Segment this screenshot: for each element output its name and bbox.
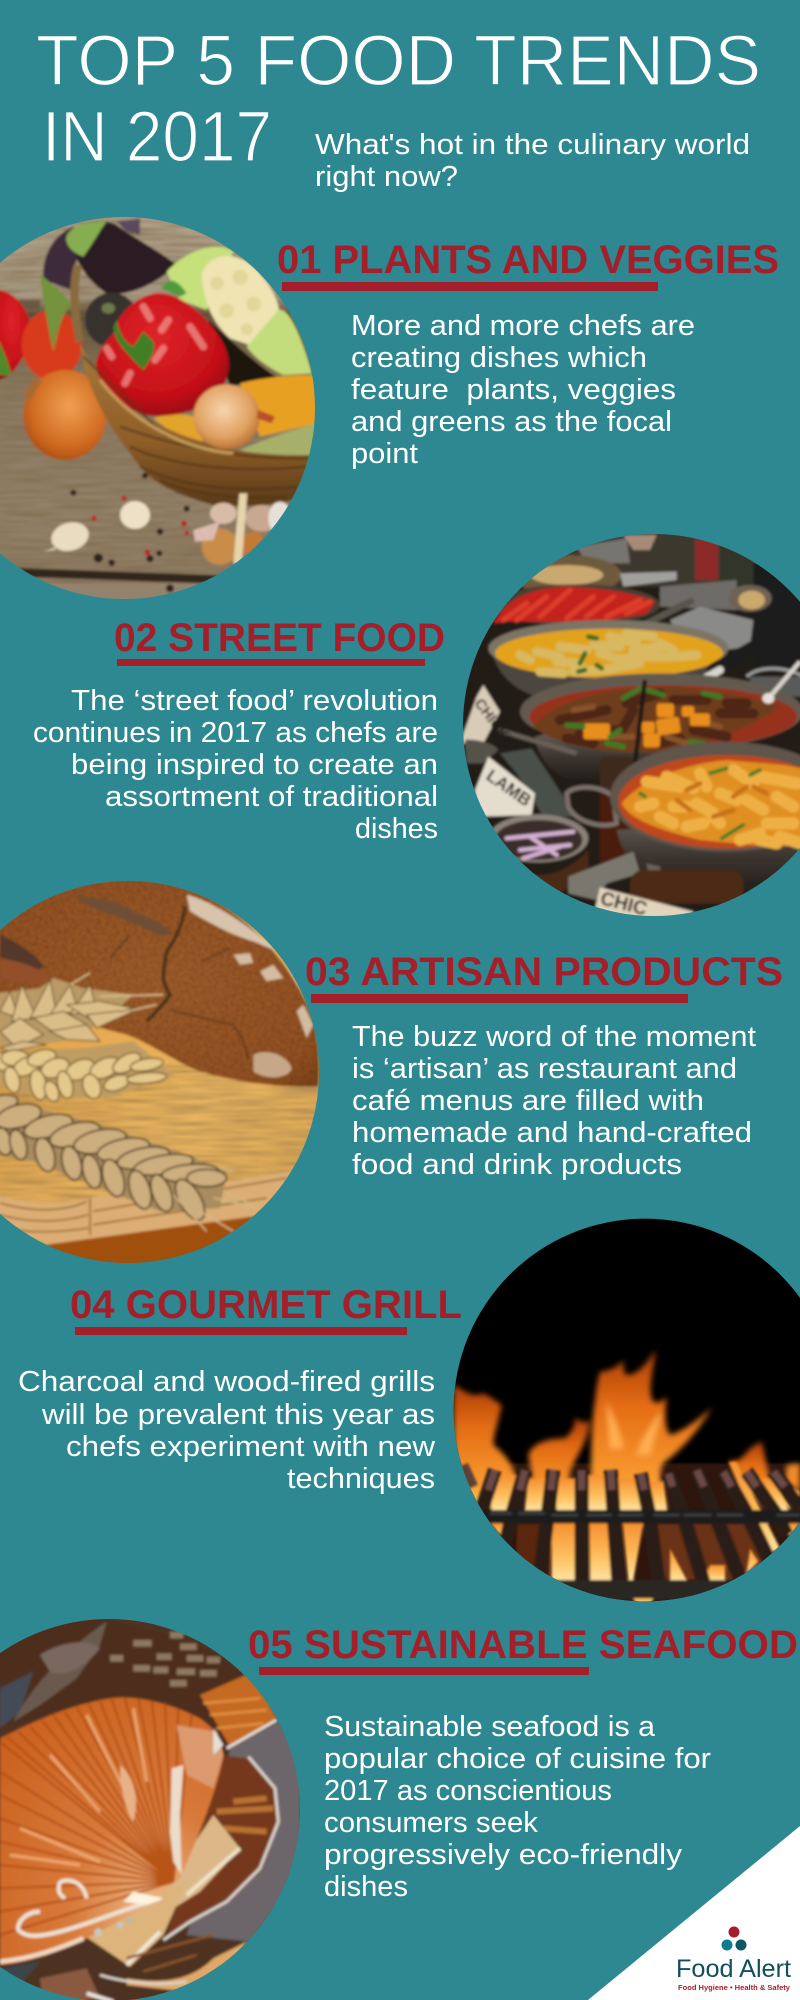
body text: feature plants, veggies [351,374,676,406]
body text [352,1021,756,1181]
body text [18,1366,436,1495]
logo dots [722,1926,746,1950]
heading: 03 artisan products: 03 ARTISAN PRODUCTS [305,950,783,994]
photo: flames over grill [450,1215,800,1608]
heading underline [117,659,425,666]
body text: Charcoal and wood-fired grills [18,1366,435,1398]
heading: 02 street food: 02 STREET FOOD [114,616,445,660]
photo: street food pans: CHIC [598,888,649,920]
subtitle: right now? [315,161,458,193]
heading: 04 gourmet grill: 04 GOURMET GRILL [70,1283,462,1327]
body text: continues in 2017 as chefs are [33,717,438,749]
photo: street food pans: LAMB [483,765,535,810]
body text: Sustainable seafood is a [324,1711,656,1743]
body text: More and more chefs are [351,310,695,342]
title: TOP 5 FOOD TRENDS [36,22,761,101]
panel: 05 sustainable seafood [0,1615,798,2000]
logo: Food Alert [676,1926,791,1992]
body text: is ‘artisan’ as restaurant and [352,1053,737,1085]
title [36,22,761,177]
body text: will be prevalent this year as [41,1399,435,1431]
heading underline [311,994,688,1003]
body text: dishes [324,1871,408,1903]
body text: homemade and hand-crafted [352,1117,752,1149]
photo: street food pans: CHICKEN [471,696,524,759]
body text: chefs experiment with new [66,1431,436,1463]
body text: dishes [355,813,438,845]
body text: consumers seek [324,1807,538,1839]
body text: creating dishes which [351,342,647,374]
body text: assortment of traditional [105,781,438,813]
panel: 03 artisan products [0,875,783,1271]
heading: 01 plants and veggies: 01 PLANTS AND VEGGIES [277,238,779,282]
heading underline [282,282,658,291]
subtitle: What's hot in the culinary world [315,129,750,161]
title: IN 2017 [42,98,272,177]
body text: The buzz word of the moment [352,1021,756,1053]
photo: scallop shells [0,1615,310,2000]
heading underline [75,1327,407,1335]
panel: 01 plants and veggies [0,210,779,610]
body text: techniques [287,1463,435,1495]
photo: basket of vegetables [0,210,323,610]
body text: café menus are filled with [352,1085,704,1117]
body text: progressively eco-friendly [324,1839,683,1871]
logo tagline: Food Hygiene • Health & Safety [678,1983,791,1992]
body text: being inspired to create an [71,749,438,781]
body text: The ‘street food’ revolution [71,685,438,717]
photo: street food pans [460,530,800,927]
photo: bread and wheat [0,875,327,1271]
panel: 04 gourmet grill [18,1215,800,1608]
body text [33,685,438,845]
heading: 05 sustainable seafood: 05 SUSTAINABLE SEAFOOD [248,1623,798,1667]
white corner triangle [588,1826,800,2000]
body text: and greens as the focal [351,406,672,438]
body text [324,1711,711,1903]
panel: 02 street food [33,530,800,927]
subtitle [315,129,750,193]
body text: point [351,438,418,470]
body text [351,310,695,470]
body text: food and drink products [352,1149,682,1181]
heading underline [259,1667,589,1675]
body text: popular choice of cuisine for [324,1743,711,1775]
body text: 2017 as conscientious [324,1775,612,1807]
logo wordmark: Food Alert [676,1955,791,1983]
